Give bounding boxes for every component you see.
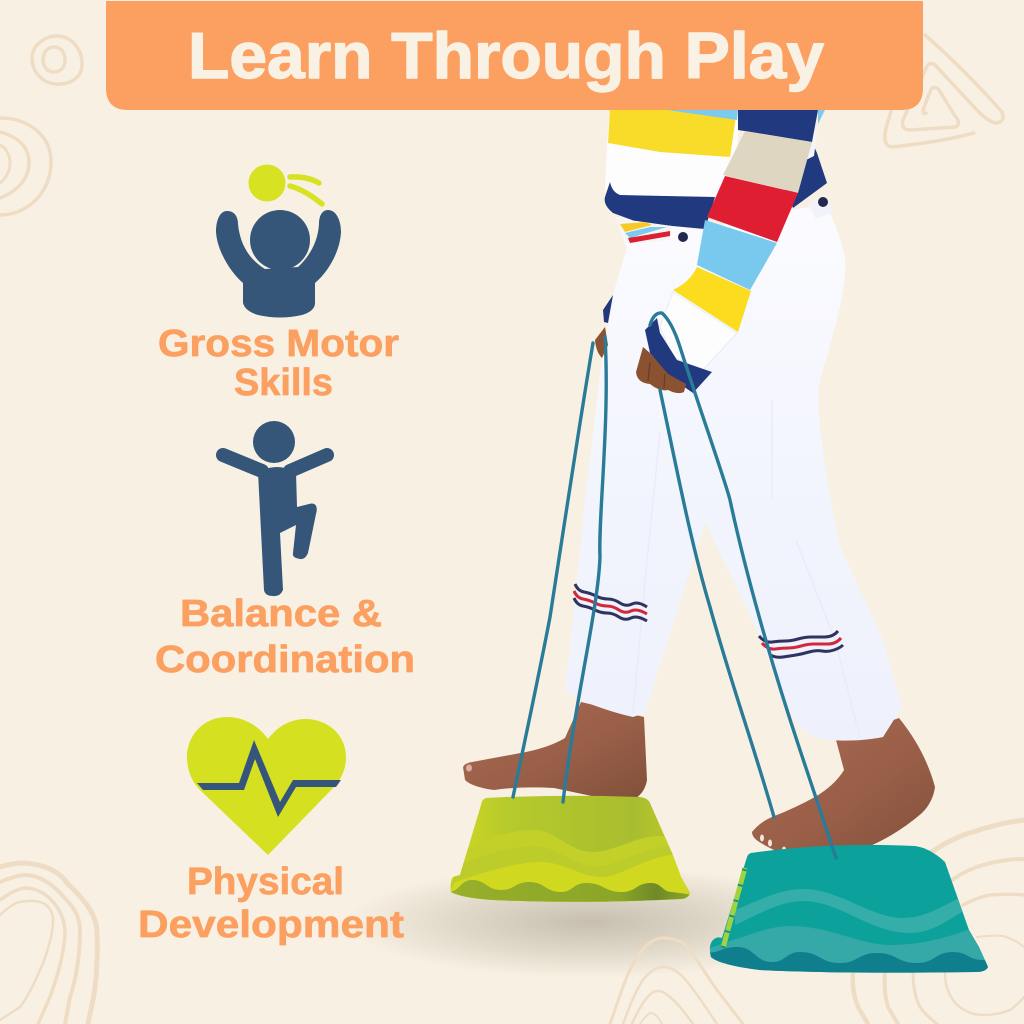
toe nails <box>466 764 796 856</box>
label: physical development <box>138 861 404 946</box>
label: balance and coordination <box>155 593 415 681</box>
striped sleeve <box>738 110 818 142</box>
stilt side grip <box>723 868 745 948</box>
label: physical development: Physical <box>187 861 344 903</box>
waistband stripes and buttons <box>615 218 672 244</box>
photo: child on balance stilts <box>440 110 995 980</box>
rear trouser trim <box>574 584 647 621</box>
back foot <box>463 702 647 800</box>
icon: balancing child <box>223 421 327 596</box>
front foot <box>752 718 935 858</box>
teal balance stilt <box>710 844 988 973</box>
sweater body <box>605 110 740 198</box>
rear hand and cuff <box>595 327 608 358</box>
label: balance and coordination: Coordination <box>155 639 415 681</box>
yellow balance stilt <box>450 796 690 902</box>
hand <box>636 347 686 393</box>
ropes <box>513 313 836 858</box>
icon: heart with pulse <box>187 717 346 855</box>
label: gross motor skills: Skills <box>234 362 333 404</box>
title banner <box>106 1 923 110</box>
front trouser trim <box>759 631 843 657</box>
icon: child with ball <box>216 164 341 318</box>
title banner: Learn Through Play <box>188 19 824 92</box>
ground shadow <box>345 866 835 978</box>
label: gross motor skills <box>158 323 399 404</box>
label: gross motor skills: Gross Motor <box>158 323 399 365</box>
white trousers <box>565 205 902 741</box>
label: balance and coordination: Balance & <box>180 593 382 635</box>
decorative swirls lower right <box>610 820 1024 1024</box>
label: physical development: Development <box>138 904 404 946</box>
